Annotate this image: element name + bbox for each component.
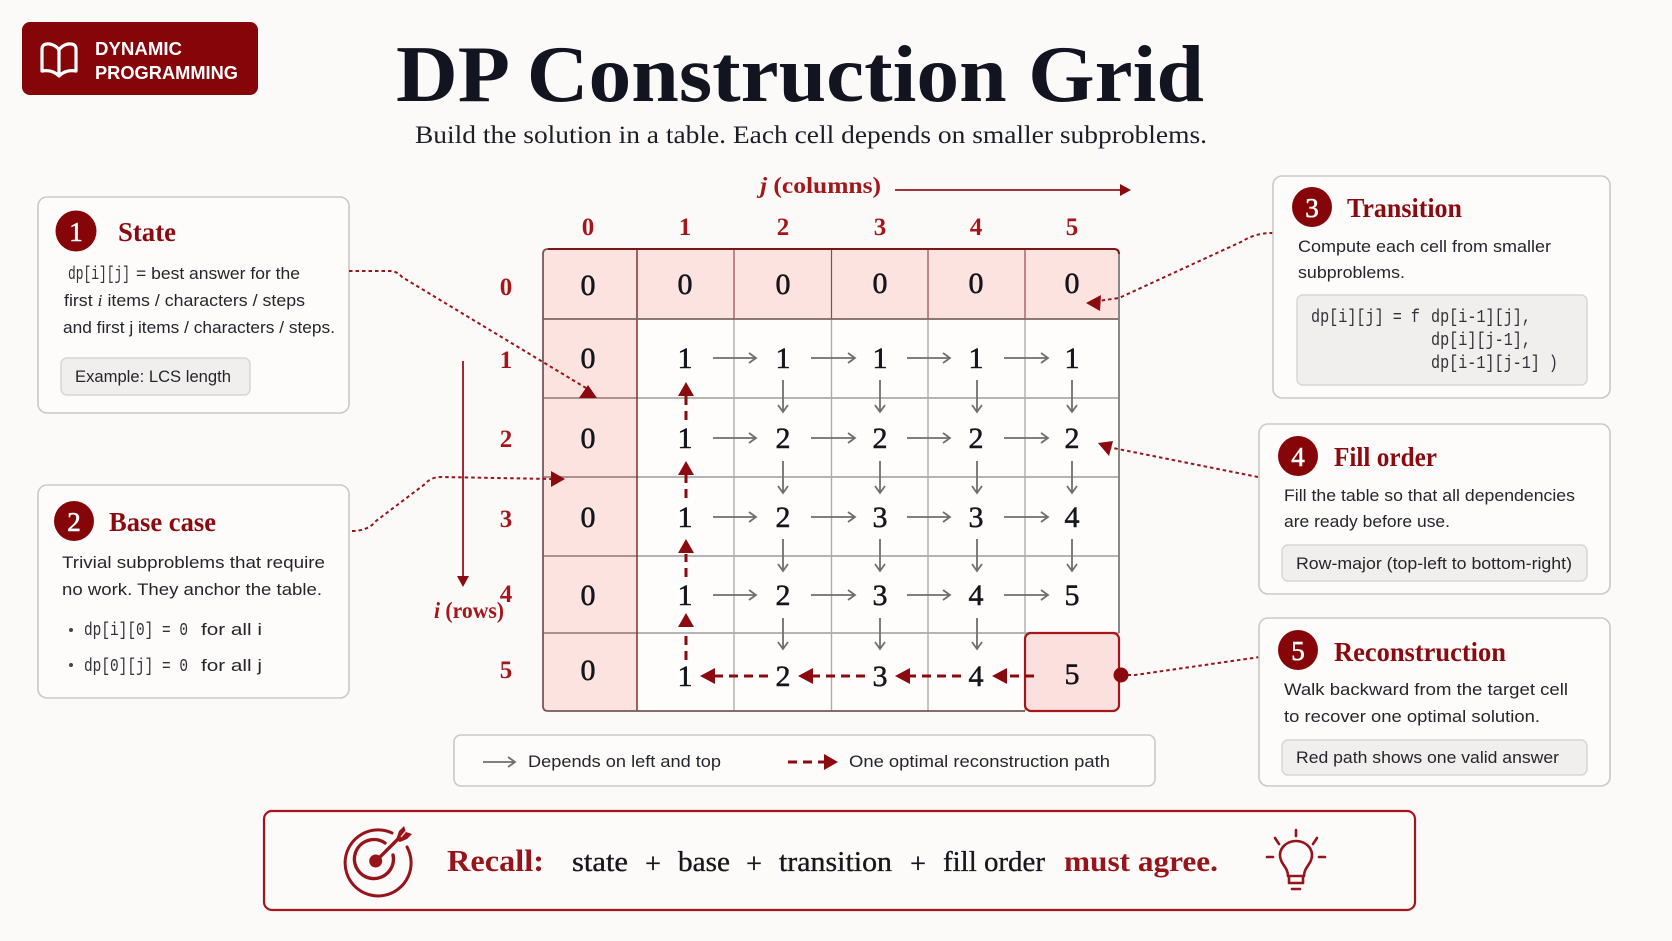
connector: base case to grid xyxy=(352,471,565,531)
state description xyxy=(63,264,335,337)
reconstruction chip xyxy=(1282,740,1587,775)
grid values: 0 xyxy=(580,501,596,534)
grid values: 1 xyxy=(776,342,790,375)
connector: reconstruction to target cell xyxy=(1114,657,1260,682)
transition description: Compute each cell from smaller xyxy=(1298,237,1551,256)
heading: fill order: Fill order xyxy=(1334,442,1437,472)
grid values: 2 xyxy=(776,501,790,534)
fill order description: Fill the table so that all dependencies xyxy=(1284,486,1575,505)
dependency arrows xyxy=(713,353,1077,649)
connector: state to grid xyxy=(349,271,597,398)
recall equation: transition xyxy=(779,847,892,878)
state description: and first j items / characters / steps. xyxy=(63,318,335,337)
column headers: 1 xyxy=(679,214,691,241)
subtitle: Build the solution in a table. Each cell depends on smaller subproblems. xyxy=(415,122,1207,149)
grid values: 2 xyxy=(776,579,790,612)
step number 1 xyxy=(56,210,96,252)
row headers: 3 xyxy=(500,506,512,533)
grid values: 3 xyxy=(968,501,984,534)
step number 4 xyxy=(1278,436,1318,476)
icon: open book xyxy=(42,44,76,76)
recall equation: + xyxy=(645,849,661,880)
recall banner xyxy=(264,811,1415,910)
base case description: no work. They anchor the table. xyxy=(62,580,322,599)
grid values: 3 xyxy=(872,660,888,693)
grid values: 0 xyxy=(776,268,790,301)
grid values: 1 xyxy=(678,422,692,455)
column headers: 0 xyxy=(582,214,594,241)
grid values: 0 xyxy=(580,579,596,612)
grid values: 0 xyxy=(968,267,984,300)
grid values: 0 xyxy=(580,269,596,302)
fill order chip: Row-major (top-left to bottom-right) xyxy=(1296,554,1572,573)
code block: dp[i-1][j-1] ) xyxy=(1431,354,1558,374)
reconstruction description xyxy=(1284,680,1568,726)
grid values: 1 xyxy=(678,660,692,693)
legend: reconstruction label: One optimal reconstruction path xyxy=(849,752,1110,771)
connector: transition to grid xyxy=(1086,233,1273,311)
legend: dependency label: Depends on left and top xyxy=(528,752,721,771)
grid values: 2 xyxy=(872,422,888,455)
step number 1: 1 xyxy=(69,217,83,247)
badge: dynamic programming xyxy=(22,22,258,95)
transition description xyxy=(1298,237,1551,282)
icon: light bulb xyxy=(1267,830,1325,889)
grid values: 1 xyxy=(678,579,692,612)
column headers: 5 xyxy=(1066,214,1078,241)
badge label: DYNAMIC xyxy=(95,39,182,59)
legend: dependency arrow xyxy=(483,757,515,767)
grid values: 1 xyxy=(968,342,984,375)
panel: transition xyxy=(1273,176,1610,398)
grid values: 5 xyxy=(1064,658,1080,691)
transition description: subproblems. xyxy=(1298,263,1405,282)
fill order chip xyxy=(1282,545,1587,581)
base case list: for all j xyxy=(201,656,262,675)
column headers: 4 xyxy=(970,214,983,241)
panel: reconstruction xyxy=(1259,618,1610,786)
reconstruction description: to recover one optimal solution. xyxy=(1284,707,1540,726)
code block: dp[i-1][j], xyxy=(1431,308,1531,328)
title: DP Construction Grid xyxy=(396,31,1204,119)
grid values: 0 xyxy=(872,267,888,300)
step number 5 xyxy=(1278,630,1318,670)
base case description: Trivial subproblems that require xyxy=(62,553,325,572)
base case list: for all i xyxy=(201,620,262,639)
reconstruction description: Walk backward from the target cell xyxy=(1284,680,1568,699)
column headers xyxy=(582,214,1078,241)
grid values: 4 xyxy=(968,660,984,693)
axis: j columns: j (columns) xyxy=(756,173,881,198)
grid values: 0 xyxy=(1064,267,1080,300)
heading: reconstruction: Reconstruction xyxy=(1334,637,1506,667)
grid values: 3 xyxy=(872,501,888,534)
code block: dp[i][j] = f xyxy=(1311,308,1420,328)
grid values: 1 xyxy=(872,342,888,375)
grid values: 2 xyxy=(1064,422,1080,455)
state description: dp[i][j] xyxy=(68,265,130,285)
recall equation: + xyxy=(746,849,762,880)
dp grid xyxy=(543,249,1119,711)
grid values: 1 xyxy=(678,342,692,375)
row headers: 1 xyxy=(500,347,512,374)
step number 2: 2 xyxy=(67,507,81,537)
legend: reconstruction arrow xyxy=(788,754,838,770)
panel: base case xyxy=(38,485,349,698)
recall conclusion: must agree. xyxy=(1064,845,1218,878)
panel: state xyxy=(38,197,349,413)
recall equation: fill order xyxy=(943,847,1046,878)
grid values: 0 xyxy=(678,268,692,301)
column headers: 3 xyxy=(874,214,886,241)
base case list: dp[0][j] = 0 xyxy=(84,657,188,677)
recall equation: + xyxy=(910,849,926,880)
step number 3: 3 xyxy=(1305,193,1319,223)
row headers: 4 xyxy=(500,581,513,608)
grid values: 0 xyxy=(580,342,596,375)
grid values: 3 xyxy=(872,579,888,612)
recall equation: base xyxy=(678,847,730,878)
row headers xyxy=(500,274,513,684)
target cell xyxy=(1025,633,1119,711)
grid values: 1 xyxy=(1064,342,1080,375)
code block xyxy=(1297,295,1587,385)
icon: target xyxy=(345,826,412,896)
step number 4: 4 xyxy=(1291,442,1305,472)
axis: i rows xyxy=(434,361,504,623)
heading: transition: Transition xyxy=(1347,193,1462,223)
grid values: 4 xyxy=(968,579,984,612)
recall equation xyxy=(572,847,1046,880)
grid values: 1 xyxy=(678,501,692,534)
step number 3 xyxy=(1292,187,1332,227)
grid values: 2 xyxy=(968,422,984,455)
base case list xyxy=(69,620,262,677)
grid values: 5 xyxy=(1064,579,1080,612)
legend xyxy=(454,735,1155,786)
step number 2 xyxy=(54,501,94,541)
grid values: 2 xyxy=(776,422,790,455)
heading: base case: Base case xyxy=(109,507,216,537)
row headers: 0 xyxy=(500,274,512,301)
example chip xyxy=(61,358,250,395)
reconstruction chip: Red path shows one valid answer xyxy=(1296,748,1559,767)
recall label: Recall: xyxy=(447,843,544,878)
column headers: 2 xyxy=(777,214,789,241)
step number 5: 5 xyxy=(1291,636,1305,666)
grid values: 0 xyxy=(580,422,596,455)
grid values xyxy=(580,267,1080,693)
example chip: Example: LCS length xyxy=(75,367,231,386)
grid values: 0 xyxy=(580,654,596,687)
grid values: 4 xyxy=(1064,501,1080,534)
recall equation: state xyxy=(572,847,628,878)
reconstruction path xyxy=(678,382,1034,684)
code block: dp[i][j-1], xyxy=(1431,331,1531,351)
base case list: dp[i][0] = 0 xyxy=(84,621,188,641)
badge label: PROGRAMMING xyxy=(95,63,238,83)
row headers: 5 xyxy=(500,657,512,684)
base case description xyxy=(62,553,325,599)
grid values: 2 xyxy=(776,660,790,693)
fill order description: are ready before use. xyxy=(1284,512,1450,531)
state description: first i items / characters / steps xyxy=(64,291,305,310)
fill order description xyxy=(1284,486,1575,531)
connector: fill order to grid xyxy=(1098,441,1258,477)
state description: = best answer for the xyxy=(136,264,300,283)
heading: state: State xyxy=(118,217,176,247)
axis: j columns xyxy=(756,173,1131,198)
row headers: 2 xyxy=(500,426,512,453)
axis: i rows: i (rows) xyxy=(434,598,504,623)
panel: fill order xyxy=(1259,424,1610,594)
